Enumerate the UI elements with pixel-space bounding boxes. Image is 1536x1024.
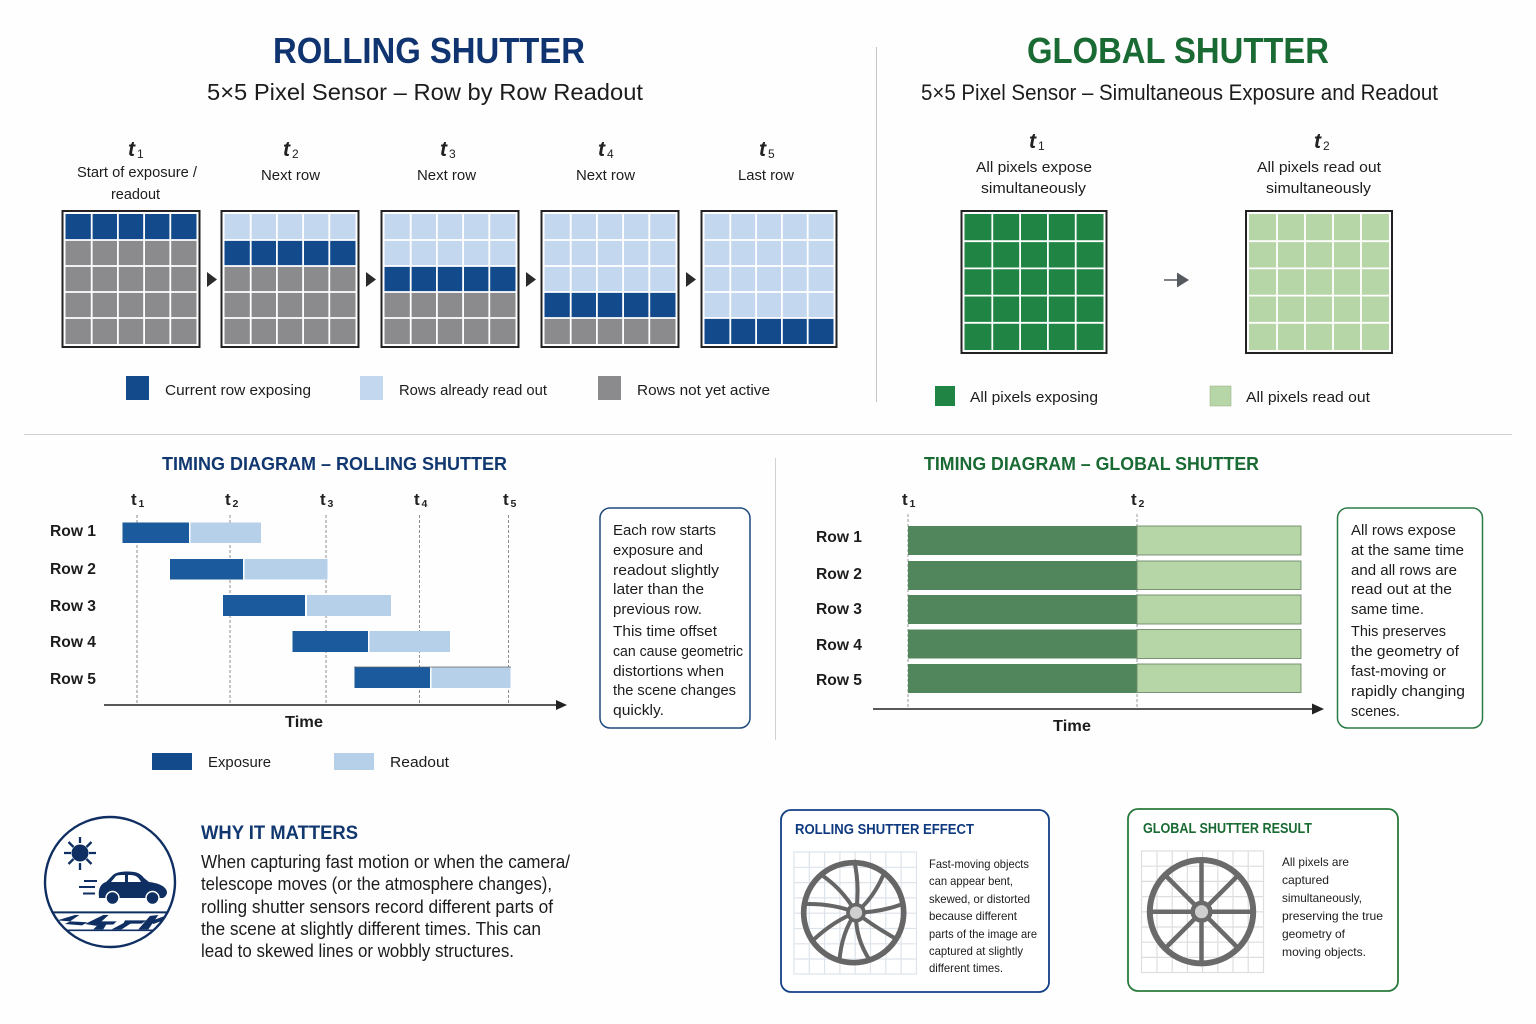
- caption: global t1: [976, 159, 1092, 197]
- legend item: all pixels read out: All pixels read out: [1246, 389, 1371, 406]
- callout: rolling shutter explanation: readout slightly: [613, 562, 720, 579]
- arrow: time axis: [873, 704, 1324, 714]
- time labels: 1: [138, 498, 144, 510]
- pixel grid: rolling t5: [702, 211, 836, 347]
- time labels: t: [131, 490, 137, 509]
- row labels: Row 4: [50, 634, 96, 651]
- heading: timing diagram rolling shutter: TIMING DIAGRAM – ROLLING SHUTTER: [162, 454, 507, 474]
- label: global t1: t: [1029, 130, 1037, 153]
- legend item: rows not yet active: [598, 376, 770, 400]
- caption: t1: Start of exposure /: [77, 164, 198, 181]
- icon: car with sun on wavy road: [45, 817, 175, 947]
- callout: rolling shutter explanation: later than the: [613, 581, 704, 598]
- label: t5: 5: [768, 147, 775, 161]
- label: t5: [759, 138, 775, 161]
- legend item: all pixels exposing: All pixels exposing: [970, 389, 1098, 406]
- legend: global pixel states: [935, 386, 1371, 406]
- caption: global t1: All pixels expose: [976, 159, 1092, 176]
- legend item: rows already read out: Rows already read out: [399, 382, 548, 399]
- paragraph: the scene at slightly different times. This can: [201, 919, 541, 939]
- label: t1: t: [128, 138, 136, 161]
- bars: row 4: [908, 630, 1301, 658]
- label: t2: [283, 138, 299, 161]
- time labels: 3: [328, 498, 334, 510]
- legend item: all pixels read out: [1210, 386, 1371, 406]
- legend: rolling pixel states: [126, 376, 770, 400]
- callout: global shutter explanation: and all rows are: [1351, 562, 1457, 579]
- panel text: captured: [1282, 873, 1329, 887]
- callout: global shutter explanation: All rows expose: [1351, 522, 1456, 539]
- grid with undistorted wheel: [1142, 851, 1264, 972]
- callout: global shutter explanation: [1338, 508, 1482, 728]
- label: t4: [598, 138, 614, 161]
- panel text: preserving the true: [1282, 909, 1383, 923]
- label: global t1: [1029, 130, 1045, 153]
- label: global t2: t: [1314, 130, 1322, 153]
- callout: global shutter explanation: rapidly changing: [1351, 683, 1465, 700]
- legend item: rows already read out: [360, 376, 548, 400]
- callout: global shutter explanation: read out at the: [1351, 581, 1452, 598]
- legend item: current row exposing: Current row exposing: [165, 382, 311, 399]
- panel text: because different: [929, 909, 1018, 923]
- row labels: Row 2: [816, 566, 862, 583]
- callout: global shutter explanation: fast-moving or: [1351, 663, 1446, 680]
- label: t3: [440, 138, 456, 161]
- time labels: t: [414, 490, 420, 509]
- caption: t2: Next row: [261, 167, 320, 184]
- callout: global shutter explanation: This preserves: [1351, 623, 1446, 640]
- time labels: t: [902, 490, 908, 509]
- panel text: captured at slightly: [929, 944, 1023, 958]
- paragraph: [201, 852, 570, 961]
- label: t3: 3: [449, 147, 456, 161]
- row labels: Row 3: [816, 601, 862, 618]
- panel text: parts of the image are: [929, 927, 1037, 941]
- callout: global shutter explanation: scenes.: [1351, 703, 1400, 720]
- callout: rolling shutter explanation: previous row.: [613, 601, 702, 618]
- subtitle: rolling shutter: 5×5 Pixel Sensor – Row by Row Readout: [207, 79, 644, 105]
- pixel grid: rolling t4: [542, 211, 678, 347]
- caption: global t2: [1257, 159, 1382, 197]
- bars: row 1: [122, 522, 261, 543]
- row labels: Row 3: [50, 598, 96, 615]
- arrow: [526, 272, 536, 287]
- legend item: readout: [334, 753, 450, 771]
- arrow: global transition: [1164, 272, 1189, 288]
- pixel grid: rolling t3: [382, 211, 518, 347]
- caption: t3: Next row: [417, 167, 476, 184]
- label: t2: t: [283, 138, 291, 161]
- time labels: 5: [510, 498, 516, 510]
- callout: rolling shutter explanation: exposure and: [613, 542, 703, 559]
- panel text: different times.: [929, 961, 1003, 975]
- bars: row 1: [908, 526, 1301, 555]
- callout: rolling shutter explanation: [600, 508, 750, 728]
- arrow: time axis: [104, 700, 567, 710]
- label: t4: 4: [607, 147, 614, 161]
- arrow: [686, 272, 696, 287]
- label: t3: t: [440, 138, 448, 161]
- time labels: t: [1131, 490, 1137, 509]
- heading: why it matters: WHY IT MATTERS: [201, 823, 358, 844]
- bars: row 5: [908, 664, 1301, 693]
- panel text: skewed, or distorted: [929, 892, 1030, 906]
- row labels: Row 1: [816, 529, 862, 546]
- label: t4: t: [598, 138, 606, 161]
- time labels: t: [225, 490, 231, 509]
- time labels: 2: [232, 498, 238, 510]
- time labels: 2: [1138, 498, 1144, 510]
- row labels: Row 5: [50, 671, 96, 688]
- chart: global shutter timing diagram: [816, 490, 1324, 735]
- caption: t1: [77, 164, 198, 203]
- legend item: current row exposing: [126, 376, 311, 400]
- paragraph: telescope moves (or the atmosphere changes),: [201, 874, 552, 894]
- time labels: [902, 490, 1144, 510]
- panel: rolling shutter time labels: [77, 138, 794, 203]
- callout: rolling shutter explanation: Each row starts: [613, 522, 716, 539]
- bars: row 4: [292, 631, 450, 652]
- row labels: [50, 523, 96, 688]
- time labels: t: [320, 490, 326, 509]
- bars: row 5: [354, 667, 511, 688]
- panel heading: ROLLING SHUTTER EFFECT: [795, 822, 974, 838]
- axis label: time: Time: [285, 714, 323, 731]
- panel text: Fast-moving objects: [929, 857, 1029, 871]
- panel heading: GLOBAL SHUTTER RESULT: [1143, 821, 1312, 837]
- label: t1: [128, 138, 144, 161]
- axis label: time: Time: [1053, 718, 1091, 735]
- caption: global t2: simultaneously: [1266, 180, 1372, 197]
- bars: row 2: [908, 561, 1301, 590]
- bars: row 3: [223, 595, 391, 616]
- time labels: t: [503, 490, 509, 509]
- legend item: readout: Readout: [390, 754, 450, 771]
- caption: t5: Last row: [738, 167, 794, 184]
- panel text: can appear bent,: [929, 874, 1013, 888]
- label: global t1: 1: [1038, 139, 1045, 153]
- label: global t2: [1314, 130, 1330, 153]
- paragraph: lead to skewed lines or wobbly structures.: [201, 941, 514, 961]
- row labels: Row 2: [50, 561, 96, 578]
- legend item: rows not yet active: Rows not yet active: [637, 382, 770, 399]
- row labels: Row 4: [816, 637, 862, 654]
- panel text: simultaneously,: [1282, 891, 1362, 905]
- callout: global shutter explanation: at the same time: [1351, 542, 1464, 559]
- paragraph: rolling shutter sensors record different parts of: [201, 897, 554, 917]
- caption: global t1: simultaneously: [981, 180, 1087, 197]
- title: global shutter: GLOBAL SHUTTER: [1027, 30, 1329, 71]
- pixel grid: rolling t2: [222, 211, 358, 347]
- time labels: 4: [422, 498, 428, 510]
- panel text: [929, 857, 1037, 975]
- legend item: exposure: [152, 753, 271, 771]
- callout: global shutter explanation: same time.: [1351, 601, 1424, 618]
- time labels: [131, 490, 516, 510]
- row labels: [816, 529, 862, 689]
- caption: t1: readout: [111, 186, 161, 203]
- chart: rolling shutter timing diagram: [50, 490, 567, 731]
- pixel grid: global read out: [1246, 211, 1392, 353]
- row labels: Row 1: [50, 523, 96, 540]
- label: t2: 2: [292, 147, 299, 161]
- callout: global shutter explanation: the geometry of: [1351, 643, 1460, 660]
- arrow: [366, 272, 376, 287]
- bars: row 2: [170, 559, 328, 580]
- paragraph: When capturing fast motion or when the camera/: [201, 852, 570, 872]
- callout: rolling shutter explanation: the scene changes: [613, 682, 736, 699]
- time labels: 1: [910, 498, 916, 510]
- legend: timing rolling: [152, 753, 450, 771]
- legend item: exposure: Exposure: [208, 754, 271, 771]
- heading: timing diagram global shutter: TIMING DIAGRAM – GLOBAL SHUTTER: [924, 454, 1259, 474]
- grid with distorted wheel: [794, 852, 916, 974]
- callout: rolling shutter explanation: quickly.: [613, 702, 664, 719]
- label: global t2: 2: [1323, 139, 1330, 153]
- arrow: [207, 272, 217, 287]
- pixel grid: global exposing: [962, 211, 1106, 353]
- label: t5: t: [759, 138, 767, 161]
- label: t1: 1: [137, 147, 144, 161]
- panel: rolling shutter effect: [781, 810, 1049, 992]
- caption: t4: Next row: [576, 167, 635, 184]
- panel: global shutter result: [1128, 809, 1398, 991]
- row labels: Row 5: [816, 672, 862, 689]
- panel text: All pixels are: [1282, 855, 1349, 869]
- panel: global shutter time labels: [976, 130, 1382, 197]
- callout: rolling shutter explanation: This time offset: [613, 623, 718, 640]
- panel text: geometry of: [1282, 927, 1346, 941]
- legend item: all pixels exposing: [935, 386, 1098, 406]
- caption: global t2: All pixels read out: [1257, 159, 1382, 176]
- pixel grid: rolling t1: [62, 211, 200, 347]
- subtitle: global shutter: 5×5 Pixel Sensor – Simultaneous Exposure and Readout: [921, 80, 1438, 105]
- panel text: [1282, 855, 1383, 959]
- text block: why it matters: [201, 823, 570, 961]
- bars: row 3: [908, 595, 1301, 624]
- title: rolling shutter: ROLLING SHUTTER: [273, 30, 585, 71]
- callout: rolling shutter explanation: can cause geometric: [613, 643, 743, 660]
- panel text: moving objects.: [1282, 945, 1366, 959]
- callout: rolling shutter explanation: distortions when: [613, 663, 724, 680]
